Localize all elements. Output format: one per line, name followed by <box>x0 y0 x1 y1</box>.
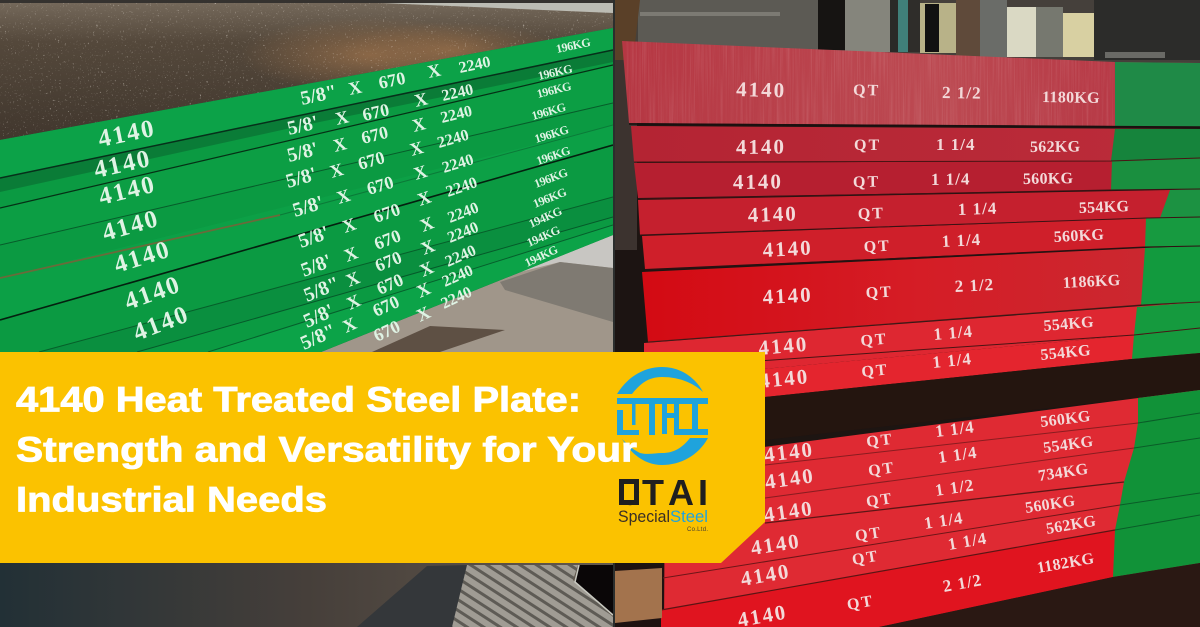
stamped labels on green plates: X <box>334 185 353 208</box>
stamped labels on green plates: X <box>340 214 359 237</box>
stamped labels on red plates: 4140 <box>762 235 813 262</box>
stamped labels on green plates: 4140 <box>129 301 193 347</box>
stamped labels on green plates: 670 <box>356 147 387 174</box>
logo emblem <box>617 367 708 465</box>
stamped labels on red plates: QT <box>865 431 894 451</box>
stamped labels on green plates: 2240 <box>445 199 481 227</box>
stamped labels on red plates: 1 1/4 <box>941 230 982 251</box>
stamped labels on green plates: 4140 <box>111 236 174 279</box>
stamped labels on green plates: 670 <box>377 68 407 93</box>
title <box>16 380 637 520</box>
stamped labels on green plates: 5/8' <box>285 111 320 140</box>
stamped labels on red plates: 562KG <box>1030 139 1081 156</box>
stamped labels on green plates: 2240 <box>440 151 476 177</box>
stamped labels on red plates: 554KG <box>1042 433 1095 457</box>
stamped labels on red plates: QT <box>846 592 875 614</box>
stamped labels on green plates: 5/8" <box>298 81 339 110</box>
stamped labels on red plates: 4140 <box>762 496 815 527</box>
stamped labels on green plates: 5/8' <box>283 163 319 193</box>
logo tagline: Co.Ltd. <box>687 527 708 533</box>
stamped labels on green plates: 196KG <box>535 79 572 101</box>
stamped labels on green plates: X <box>333 106 351 129</box>
stamped labels on red plates: QT <box>853 82 880 99</box>
stamped labels on green plates: 4140 <box>91 145 154 184</box>
stamped labels on green plates: 670 <box>359 122 390 148</box>
stamped labels on green plates: 5/8' <box>285 138 320 167</box>
stamped labels on green plates: 5/8" <box>301 273 343 307</box>
grey concrete floor right of stack <box>321 235 613 352</box>
stamped labels on red plates: 1 1/4 <box>934 417 976 441</box>
stamped labels on red plates: 4140 <box>739 559 792 591</box>
stamped labels on green plates: 194KG <box>525 223 562 250</box>
stamped labels on green plates: 194KG <box>527 204 564 231</box>
stamped labels on green plates: X <box>331 133 349 156</box>
stamped labels on red plates: 554KG <box>1079 198 1130 217</box>
stamped labels on red plates: 560KG <box>1023 170 1074 188</box>
workshop floor below banner <box>0 563 613 627</box>
stamped labels on green plates: 194KG <box>522 242 560 270</box>
stamped labels on green plates: 2240 <box>443 242 479 271</box>
stamped labels on red plates: QT <box>853 174 880 191</box>
stamped labels on green plates: 196KG <box>533 122 570 146</box>
stamped labels on green plates: 2240 <box>439 284 475 313</box>
stamped labels on red plates: 1 1/4 <box>923 508 965 533</box>
stamped labels on green plates: 2240 <box>440 81 475 105</box>
stamped labels on red plates: 562KG <box>1045 513 1098 538</box>
stamped labels on green plates: 4140 <box>99 205 162 247</box>
stamped labels on green plates: X <box>415 187 434 210</box>
ground below lower stack <box>879 563 1200 627</box>
lower red plate stack <box>661 390 1200 627</box>
stamped labels on green plates: X <box>343 267 363 291</box>
stamped labels on green plates: X <box>416 257 437 281</box>
logo wordmark OTAI: O <box>620 473 640 513</box>
stamped labels on red plates: 4140 <box>736 77 786 102</box>
stamped labels on red plates: 4140 <box>749 529 802 560</box>
stamped labels on red plates: 1 1/4 <box>932 349 973 372</box>
logo tagline: Special <box>618 507 670 526</box>
stamped labels on green plates: X <box>347 77 364 99</box>
stamped labels on red plates: 1 1/4 <box>933 322 974 344</box>
stamped labels on green plates: 196KG <box>534 143 572 168</box>
green plate stack <box>0 28 613 352</box>
stamped labels on red plates: 560KG <box>1039 408 1092 431</box>
stamped labels on red plates: 734KG <box>1037 461 1090 485</box>
logo tagline <box>618 507 708 533</box>
stamped labels on red plates: QT <box>865 490 894 511</box>
stamped labels on green plates: 670 <box>364 172 396 199</box>
stamped labels on green plates: X <box>339 313 360 337</box>
stamped labels on red plates: 1 1/4 <box>946 529 989 554</box>
stamped labels on red plates: 4140 <box>763 463 816 494</box>
stamped labels on green plates: X <box>343 290 364 314</box>
stamped labels on green plates: 670 <box>373 269 406 299</box>
stamped labels on green plates: X <box>426 60 443 82</box>
stamped labels on red plates: 2 1/2 <box>941 570 984 596</box>
stamped labels on green plates: 670 <box>370 316 403 346</box>
stamped labels on red plates: 2 1/2 <box>954 275 995 296</box>
stamped labels on green plates: X <box>417 212 437 236</box>
stamped labels on green plates: X <box>411 161 430 184</box>
stamped labels on red plates: QT <box>860 331 888 350</box>
stamped labels on red plates: 1 1/4 <box>936 135 975 154</box>
stamped labels on green plates: X <box>418 235 438 259</box>
stamped labels on red plates: 554KG <box>1043 314 1095 335</box>
stamped labels on green plates: X <box>328 159 346 182</box>
stamped labels on red plates: 1 1/4 <box>957 199 998 219</box>
stamped labels on green plates: X <box>412 88 430 111</box>
stamped labels on red plates <box>733 77 1130 627</box>
logo: Otai Special Steel <box>617 367 708 533</box>
stamped labels on green plates: X <box>408 137 426 160</box>
stamped labels on red plates: 4140 <box>747 201 798 227</box>
title: Industrial Needs <box>16 480 327 520</box>
stamped labels on red plates: QT <box>854 137 881 154</box>
stamped labels on red plates: 1 1/4 <box>937 443 979 467</box>
stamped labels on red plates: 4140 <box>762 282 813 309</box>
stamped labels on green plates: 5/8' <box>298 250 335 282</box>
stamped labels on green plates: 670 <box>371 199 403 227</box>
panel: green steel plates photo <box>0 0 613 627</box>
workshop background above plates <box>615 0 1200 627</box>
stamped labels on red plates: 560KG <box>1024 492 1077 517</box>
stamped labels on green plates: X <box>341 242 361 266</box>
stamped labels on green plates: 5/8' <box>290 192 326 222</box>
stamped labels on green plates: 4140 <box>96 171 159 211</box>
stamped labels on green plates: 2240 <box>440 262 476 291</box>
stamped labels on red plates: 2 1/2 <box>942 83 982 103</box>
stamped labels on green plates: 196KG <box>537 61 574 83</box>
stamped labels on red plates: 4140 <box>763 437 815 467</box>
stamped labels on green plates: 2240 <box>445 219 481 247</box>
title: Strength and Versatility for Your <box>16 430 637 470</box>
stamped labels on red plates: 4140 <box>757 332 809 360</box>
stamped labels on red plates: QT <box>865 284 893 302</box>
stamped labels on green plates: 5/8' <box>295 222 332 253</box>
stamped labels on red plates: 1180KG <box>1042 89 1100 107</box>
stamped labels on green plates: 196KG <box>555 35 592 56</box>
stamped labels on red plates: QT <box>851 548 880 569</box>
stamped labels on green plates: X <box>413 302 433 326</box>
stamped labels on green plates: 196KG <box>530 100 567 123</box>
stamped labels on green plates: 2240 <box>457 54 492 77</box>
title: 4140 Heat Treated Steel Plate: <box>16 380 581 420</box>
stamped labels on red plates: 1182KG <box>1036 550 1096 577</box>
stamped labels on red plates: QT <box>854 524 883 545</box>
wooden spacer block <box>615 568 662 623</box>
yellow title banner <box>0 352 765 563</box>
stamped labels on red plates: QT <box>861 361 889 381</box>
stamped labels on red plates: 554KG <box>1040 342 1092 364</box>
brown top surface of plate <box>0 3 613 143</box>
stamped labels on green plates: 670 <box>369 291 402 321</box>
stamped labels on green plates: 2240 <box>444 174 480 201</box>
stamped labels on green plates: X <box>410 113 428 136</box>
upper red plate stack <box>622 41 1200 410</box>
stamped labels on red plates: 4140 <box>758 364 810 393</box>
stamped labels on red plates: 1 1/2 <box>934 475 976 500</box>
stamped labels on red plates: 4140 <box>736 135 786 159</box>
stamped labels on green plates <box>91 35 592 355</box>
stamped labels on green plates: X <box>413 278 434 302</box>
stamped labels on red plates: 4140 <box>733 169 783 194</box>
stamped labels on green plates: 4140 <box>121 271 185 316</box>
stamped labels on red plates: 1 1/4 <box>931 169 971 189</box>
stamped labels on green plates: 670 <box>372 247 405 276</box>
stamped labels on red plates: QT <box>858 205 885 223</box>
stamped labels on green plates: 4140 <box>96 115 158 153</box>
stamped labels on green plates: 196KG <box>531 185 568 211</box>
stamped labels on green plates: 5/8" <box>297 320 340 355</box>
stamped labels on green plates: 2240 <box>439 103 474 127</box>
dark gap between plate stacks <box>640 353 1200 455</box>
stamped labels on green plates: 2240 <box>435 127 471 152</box>
stamped labels on red plates: 560KG <box>1053 226 1105 246</box>
logo tagline: Steel <box>670 507 708 526</box>
logo wordmark OTAI: TAI <box>642 472 708 513</box>
stamped labels on red plates: 1186KG <box>1062 272 1121 292</box>
stamped labels on green plates: 196KG <box>532 165 570 191</box>
stamped labels on red plates: QT <box>863 238 891 256</box>
panel: red steel plates photo <box>613 0 1200 627</box>
stamped labels on green plates: 670 <box>371 225 404 254</box>
stamped labels on green plates: 5/8' <box>300 300 337 333</box>
stamped labels on red plates: QT <box>867 459 896 480</box>
stamped labels on green plates: 670 <box>360 99 391 125</box>
